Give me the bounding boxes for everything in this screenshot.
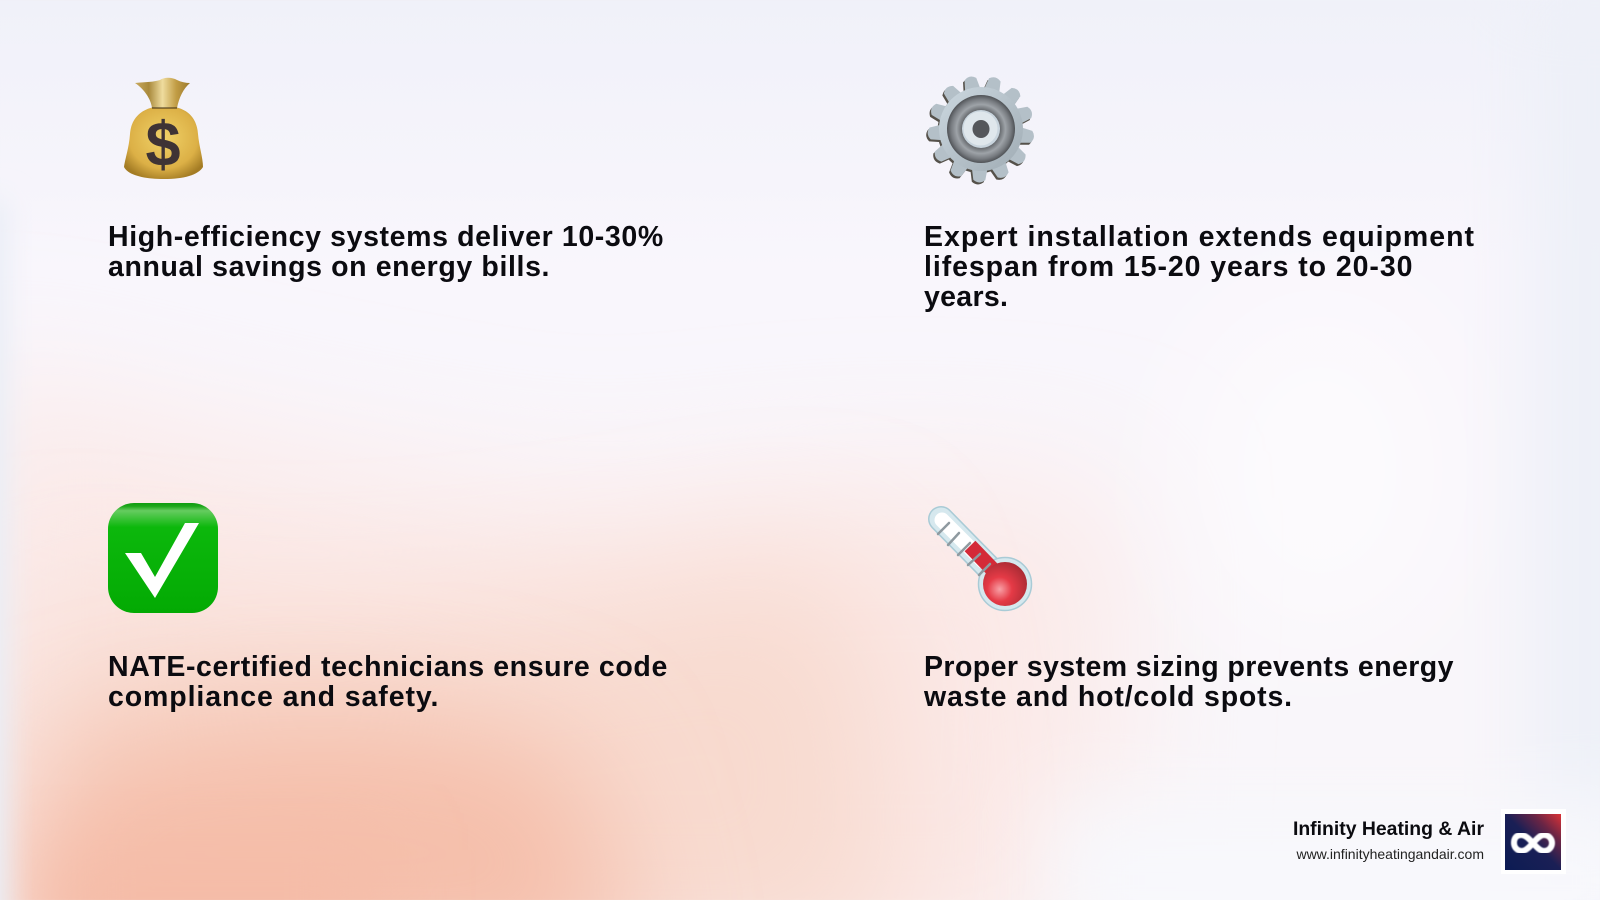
icon: money bag <box>124 78 203 180</box>
brand name: Infinity Heating & Air <box>1293 818 1484 840</box>
text: lifespan <box>924 221 1475 313</box>
icon: check mark <box>108 503 218 613</box>
text: certified technicians: NATE-certified technicians ensure code <box>108 651 668 683</box>
text: system sizing: waste and hot/cold spots. <box>924 681 1293 713</box>
logo <box>1501 809 1566 870</box>
icon: money bag: $ <box>145 110 181 180</box>
text: savings: High-efficiency systems deliver 10-30% <box>108 221 664 253</box>
text: certified technicians <box>108 651 668 713</box>
text: savings <box>108 221 664 283</box>
icon: gear <box>926 76 1034 184</box>
text: system sizing: Proper system sizing prevents energy <box>924 651 1454 683</box>
text: certified technicians: compliance and safety. <box>108 681 439 713</box>
icon: thermometer <box>928 506 1032 612</box>
brand url: www.infinityheatingandair.com <box>1296 846 1484 862</box>
text: system sizing <box>924 651 1454 713</box>
text: lifespan: years. <box>924 281 1008 313</box>
text: lifespan: lifespan from 15-20 years to 20-30 <box>924 251 1413 283</box>
text: savings: annual savings on energy bills. <box>108 251 550 283</box>
text: lifespan: Expert installation extends equipment <box>924 221 1475 253</box>
